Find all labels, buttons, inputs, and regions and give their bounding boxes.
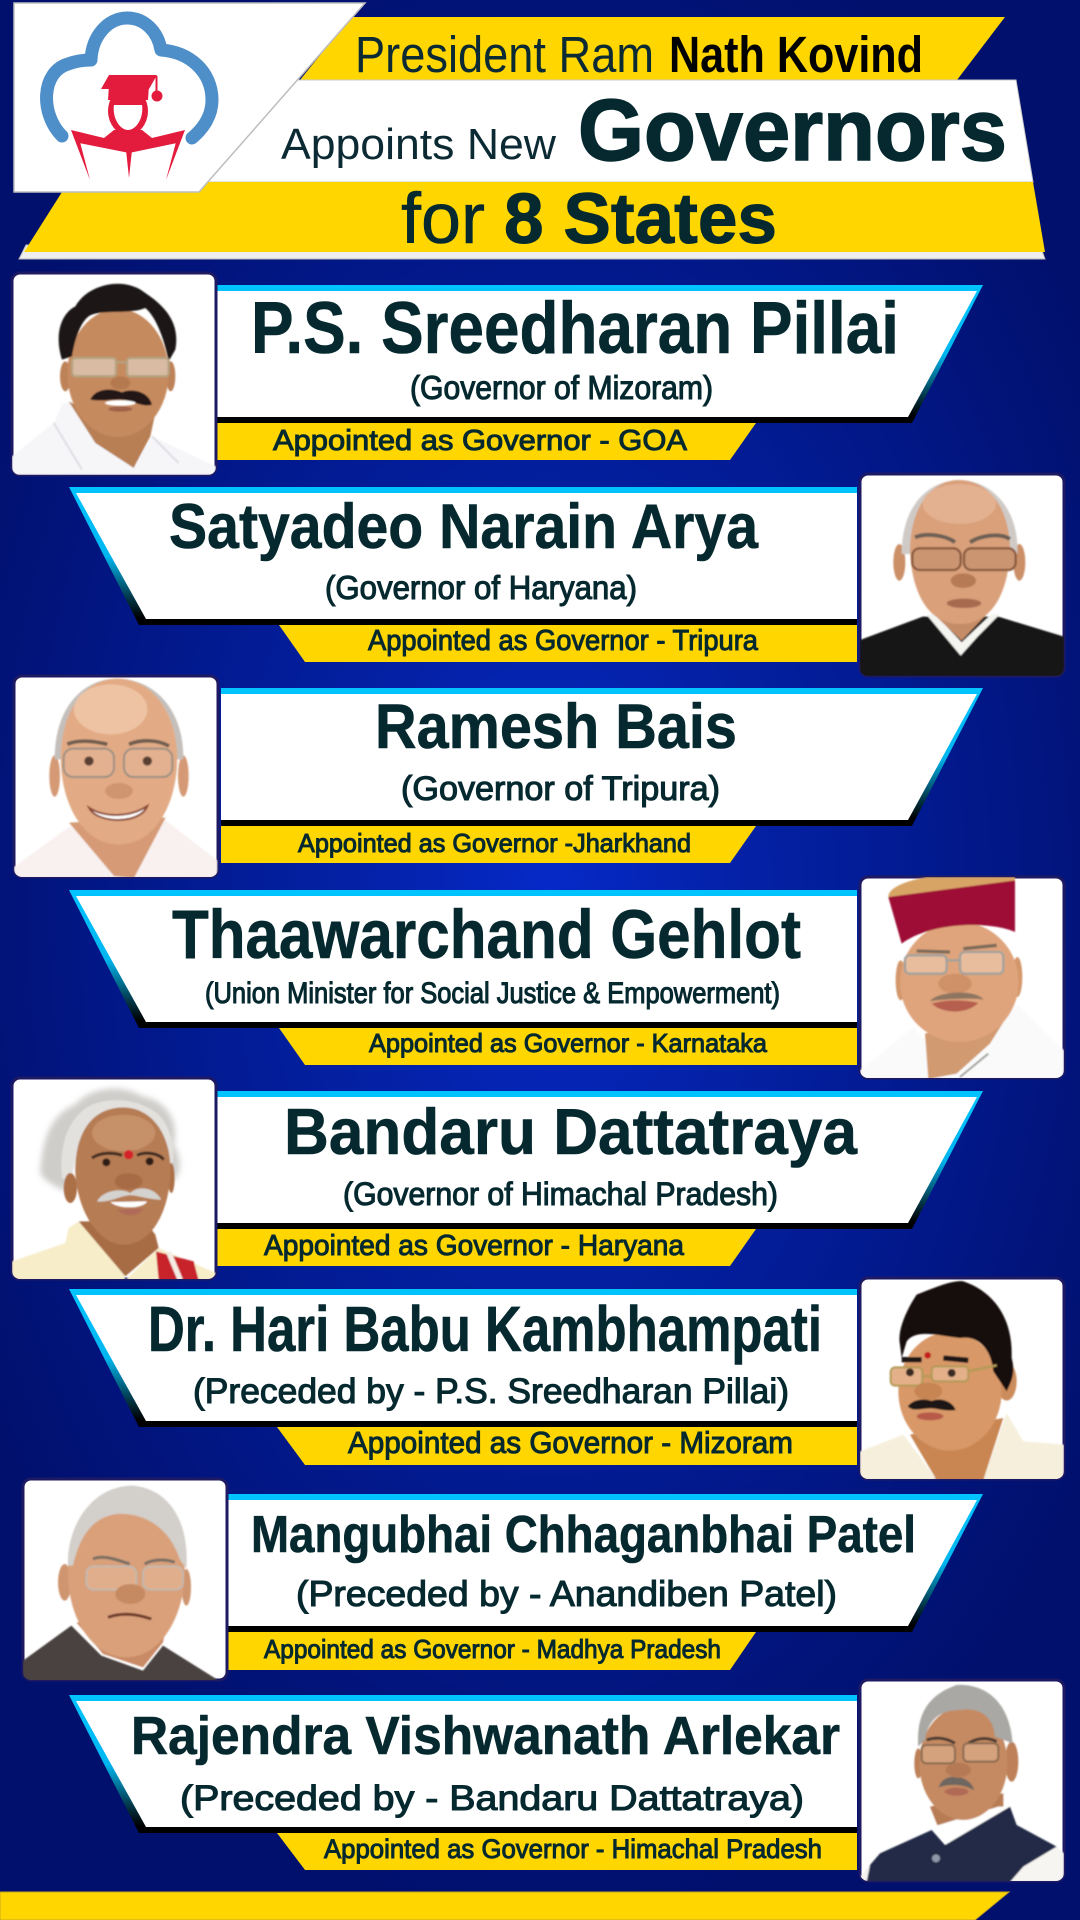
appointment strip <box>217 423 756 460</box>
portrait card <box>12 273 216 475</box>
appointment text: Appointed as Governor - Madhya Pradesh <box>264 1634 721 1664</box>
heading line 3: 8 States <box>504 180 777 259</box>
panel: Rajendra Vishwanath Arlekar <box>69 1680 1064 1882</box>
previous post: (Union Minister for Social Justice & Empowerment) <box>205 977 780 1010</box>
banner frame <box>217 285 983 423</box>
heading line 1: President Ram <box>355 26 654 83</box>
heading line 3: for <box>401 180 485 259</box>
previous post: (Preceded by - Anandiben Patel) <box>296 1573 837 1614</box>
panel: Dr. Hari Babu Kambhampati <box>69 1278 1064 1480</box>
panel: header <box>14 3 1045 259</box>
appointment text: Appointed as Governor - GOA <box>273 425 688 457</box>
portrait card <box>14 676 218 878</box>
header bottom white strip <box>19 245 1045 259</box>
appointment strip <box>277 1427 857 1465</box>
header white band <box>190 80 1033 182</box>
appointment strip <box>277 1833 857 1870</box>
appointment strip <box>217 1229 756 1266</box>
banner white plate <box>76 1701 857 1827</box>
name: Thaawarchand Gehlot <box>172 896 801 973</box>
name: Bandaru Dattatraya <box>284 1095 858 1168</box>
heading line 2: Appoints New <box>281 120 556 169</box>
name: P.S. Sreedharan Pillai <box>251 288 899 369</box>
banner white plate <box>76 493 857 619</box>
portrait card <box>860 1278 1064 1480</box>
banner frame <box>228 1494 983 1632</box>
appointment strip <box>279 625 857 662</box>
banner frame <box>69 1289 857 1427</box>
portrait card <box>12 1078 216 1280</box>
banner frame <box>221 688 983 826</box>
banner frame <box>69 890 857 1028</box>
previous post: (Governor of Himachal Pradesh) <box>343 1176 778 1212</box>
header top yellow band <box>300 17 1005 80</box>
previous post: (Governor of Tripura) <box>401 770 720 808</box>
name: Mangubhai Chhaganbhai Patel <box>251 1506 916 1564</box>
header bottom yellow band <box>24 182 1045 252</box>
panel: Mangubhai Chhaganbhai Patel <box>23 1479 983 1681</box>
footer band <box>0 1892 1009 1920</box>
appointment text: Appointed as Governor - Mizoram <box>348 1425 793 1460</box>
appointment text: Appointed as Governor - Haryana <box>264 1230 685 1262</box>
previous post: (Preceded by - P.S. Sreedharan Pillai) <box>193 1372 789 1411</box>
logo card <box>14 3 365 192</box>
panel: Bandaru Dattatraya <box>12 1078 983 1280</box>
portrait card <box>860 1680 1064 1882</box>
name: Satyadeo Narain Arya <box>169 492 759 562</box>
appointment strip <box>228 1632 756 1670</box>
banner white plate <box>217 1097 977 1223</box>
portrait card <box>23 1479 227 1681</box>
banner white plate <box>221 694 977 820</box>
name: Dr. Hari Babu Kambhampati <box>148 1293 822 1365</box>
previous post: (Governor of Haryana) <box>325 569 637 606</box>
panel: Ramesh Bais <box>14 676 983 878</box>
heading line 2 <box>281 82 1007 179</box>
appointment text: Appointed as Governor - Tripura <box>368 625 759 657</box>
portrait card <box>860 474 1064 676</box>
previous post: (Preceded by - Bandaru Dattatraya) <box>180 1779 804 1818</box>
name: Ramesh Bais <box>375 692 737 762</box>
panel: Thaawarchand Gehlot <box>69 877 1064 1079</box>
heading line 2: Governors <box>578 82 1007 179</box>
banner white plate <box>217 291 977 417</box>
appointment strip <box>279 1028 857 1065</box>
banner frame <box>69 487 857 625</box>
panel: P.S. Sreedharan Pillai <box>12 273 983 475</box>
banner white plate <box>76 896 857 1022</box>
appointment text: Appointed as Governor - Himachal Pradesh <box>324 1834 822 1864</box>
appointment strip <box>221 826 756 863</box>
previous post: (Governor of Mizoram) <box>410 369 713 406</box>
appointment text: Appointed as Governor - Karnataka <box>369 1028 768 1058</box>
heading line 1 <box>355 26 923 83</box>
banner frame <box>217 1091 983 1229</box>
panel: Satyadeo Narain Arya <box>69 474 1064 676</box>
name: Rajendra Vishwanath Arlekar <box>131 1706 840 1766</box>
heading line 1: Nath Kovind <box>669 26 923 83</box>
icon: cloud and graduate logo <box>47 18 212 180</box>
banner white plate <box>76 1295 857 1421</box>
appointment text: Appointed as Governor -Jharkhand <box>298 828 691 858</box>
portrait card <box>860 877 1064 1079</box>
banner frame <box>69 1695 857 1833</box>
banner white plate <box>228 1500 977 1626</box>
